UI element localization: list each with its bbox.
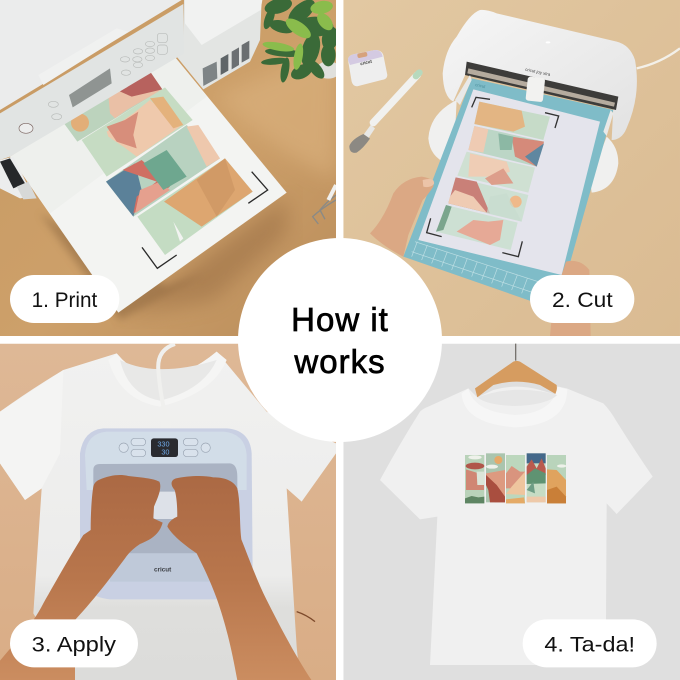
label pill: 1. Print: 1. Print bbox=[32, 288, 97, 312]
shirt artwork bbox=[465, 453, 566, 503]
artwork strip 2 bbox=[468, 126, 544, 167]
tweezers bbox=[313, 185, 336, 224]
label pill: 4. Ta-da!: 4. Ta-da! bbox=[544, 632, 635, 656]
crop marks bbox=[427, 97, 559, 257]
art panel 4 bbox=[527, 453, 546, 502]
spatula tool bbox=[349, 73, 419, 153]
hanger bbox=[475, 343, 557, 397]
plant bbox=[261, 0, 340, 83]
press display bbox=[151, 438, 178, 457]
cutting mat: cricut bbox=[475, 82, 487, 89]
art panel 5 bbox=[547, 455, 566, 503]
press display: 30 bbox=[161, 448, 169, 457]
title: works bbox=[293, 343, 386, 380]
machine side wings bbox=[428, 100, 618, 193]
right arm and hand bbox=[167, 476, 312, 680]
label pill: 2. Cut: 2. Cut bbox=[552, 288, 613, 312]
mat paper sheet bbox=[418, 89, 600, 275]
white t-shirt bbox=[0, 352, 336, 680]
press buttons bbox=[119, 438, 210, 457]
label pill: 3. Apply: 3. Apply bbox=[32, 632, 116, 656]
label pill: 1. Print bbox=[10, 275, 119, 323]
artwork strip 1 bbox=[474, 102, 550, 140]
center circle: how it works bbox=[238, 238, 442, 442]
artwork strip 4 bbox=[448, 177, 528, 222]
label pill: 2. Cut bbox=[530, 275, 634, 323]
panel 3: apply bbox=[0, 344, 336, 680]
artwork strip 3 bbox=[106, 125, 220, 217]
press display: 330 bbox=[157, 440, 170, 449]
heat press bbox=[80, 428, 253, 599]
panel 2: cut bbox=[343, 0, 680, 336]
artwork strip 4 bbox=[137, 158, 253, 255]
artwork strip 2 bbox=[82, 87, 193, 177]
art panel 1 bbox=[465, 455, 484, 503]
left hand bbox=[370, 177, 434, 257]
power cord bbox=[637, 48, 680, 68]
brand: cricut bbox=[154, 567, 172, 574]
label pill: 3. Apply bbox=[10, 619, 138, 667]
right hand bbox=[550, 261, 591, 336]
finished t-shirt bbox=[380, 387, 653, 665]
art panel 2 bbox=[486, 453, 505, 502]
press handle bbox=[153, 492, 177, 519]
machine body: cricut joy xtra bbox=[525, 67, 551, 77]
scraper tool bbox=[348, 50, 387, 86]
printed paper sheet bbox=[10, 55, 287, 313]
crop marks bbox=[142, 172, 268, 268]
title: How it bbox=[291, 301, 389, 338]
label pill: 4. Ta-da! bbox=[523, 619, 657, 667]
cutting mat bbox=[403, 78, 613, 310]
left arm and hand bbox=[0, 475, 163, 680]
artwork strip 5 bbox=[436, 205, 518, 250]
power cord bbox=[156, 344, 176, 370]
printer bbox=[0, 0, 262, 199]
art panel 3 bbox=[506, 455, 525, 503]
scraper tool: cricut bbox=[360, 58, 373, 66]
artwork strip 1 bbox=[64, 70, 162, 142]
panel 1: print bbox=[0, 0, 340, 336]
panel 4: ta-da bbox=[343, 343, 680, 680]
artwork strip 3 bbox=[457, 152, 535, 193]
machine body bbox=[443, 10, 637, 140]
